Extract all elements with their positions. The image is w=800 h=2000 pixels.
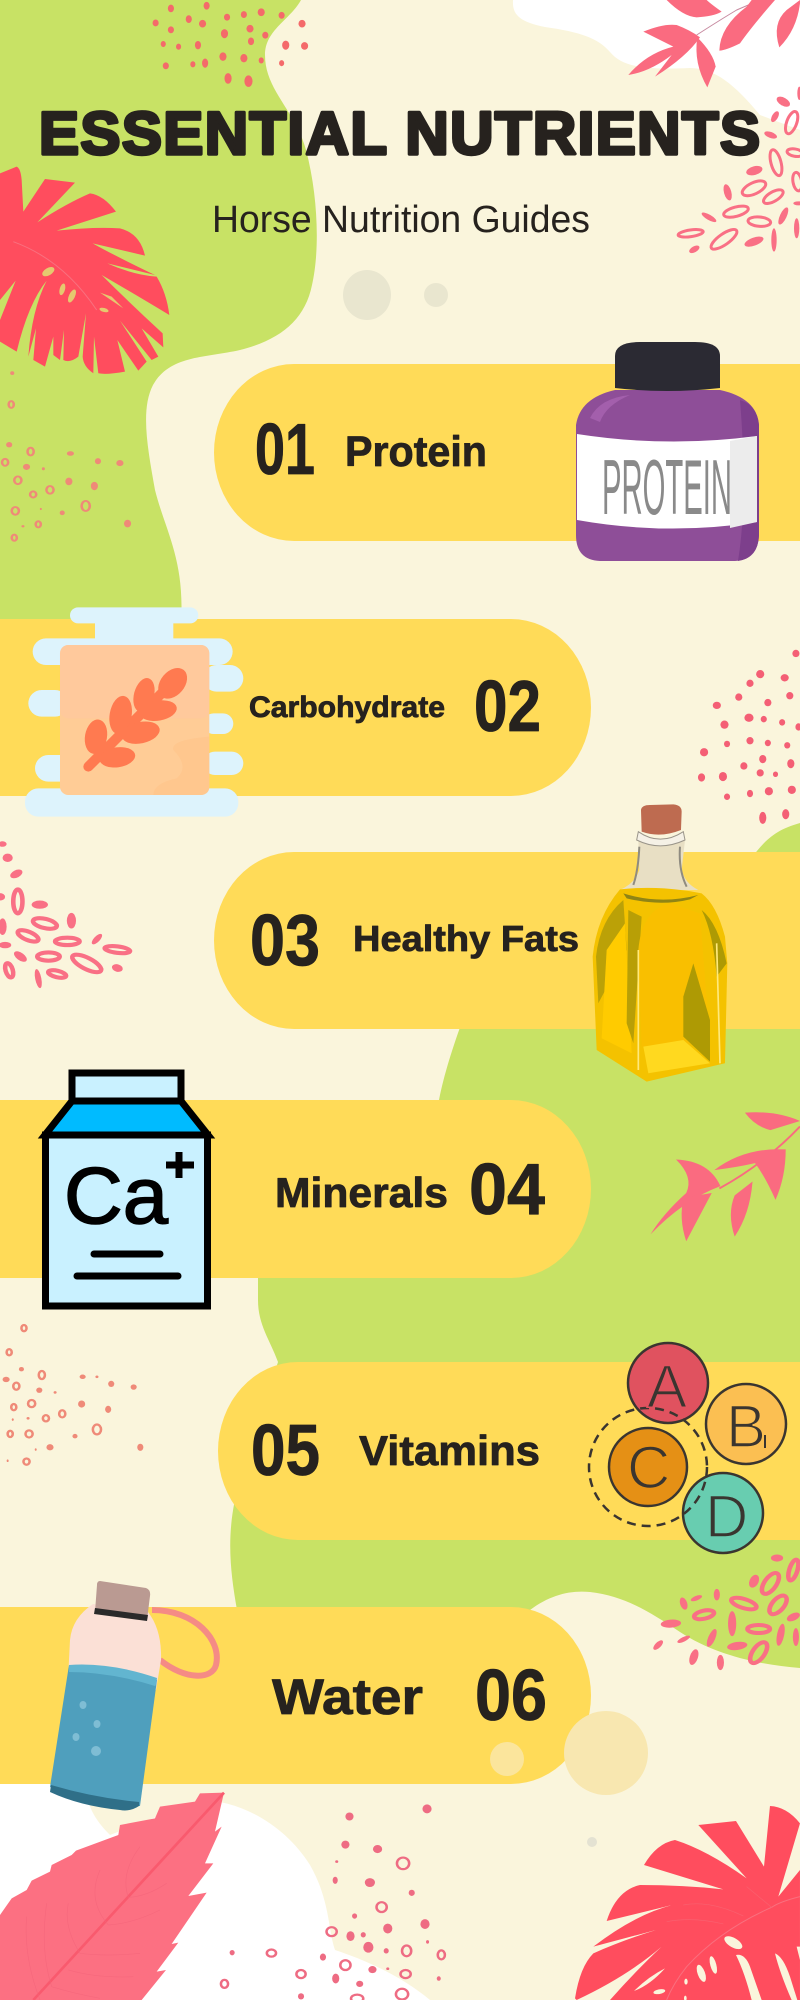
decorative circles: top: [343, 270, 448, 320]
icon: water bottle: [50, 1581, 217, 1810]
leaf cluster: bottom right: [652, 1554, 800, 1670]
icon: protein jar: [576, 342, 759, 561]
icon: vitamin balls: C: [627, 1434, 670, 1501]
label healthy fats: Healthy Fats: [353, 918, 579, 959]
panel: 04 minerals: [0, 1073, 591, 1306]
banner 04: [0, 1100, 591, 1278]
number 03: 03: [250, 901, 320, 981]
number 01: 01: [255, 410, 315, 490]
banner 01: [214, 364, 800, 541]
icon: vitamin balls: D: [705, 1483, 748, 1550]
panel: 03 healthy fats: [214, 804, 800, 1082]
banner 02: [0, 619, 591, 796]
icon: vitamin balls: [589, 1343, 786, 1553]
dot cluster: right middle: [698, 650, 800, 824]
icon: oil bottle: [593, 804, 727, 1082]
number 04: 04: [469, 1150, 545, 1230]
monstera leaf: bottom right: [575, 1806, 800, 2000]
green blob: right side: [230, 823, 800, 1668]
panel: 01 protein: [214, 342, 800, 561]
panel: 05 vitamins: [218, 1343, 800, 1553]
decorative circles: bottom: [490, 1711, 648, 1847]
label vitamins: Vitamins: [359, 1427, 540, 1474]
title: ESSENTIAL NUTRIENTS: [39, 100, 760, 167]
banner 06: [0, 1607, 591, 1784]
icon: vitamin balls: A: [647, 1353, 687, 1420]
leaf branch: top right: [628, 0, 800, 87]
icon: vitamin balls: B: [726, 1393, 766, 1460]
banner 03: [214, 852, 800, 1029]
number 06: 06: [475, 1656, 547, 1736]
green blob: top left: [0, 0, 317, 622]
leaf cluster: left middle: [0, 841, 130, 989]
label carbohydrate: Carbohydrate: [249, 691, 445, 724]
dot cluster: top: [153, 2, 308, 87]
icon: calcium carton: [45, 1073, 208, 1306]
white blob: bottom left: [0, 1780, 430, 2000]
number 02: 02: [474, 667, 541, 747]
dot cluster: left upper: [2, 371, 131, 541]
panel: 06 water: [0, 1581, 591, 1810]
label protein: Protein: [345, 428, 487, 476]
icon: wheat: [25, 607, 243, 817]
label minerals: Minerals: [275, 1169, 448, 1216]
dot cluster: left lower: [3, 1325, 143, 1465]
feather leaf: bottom left: [0, 1793, 224, 2000]
monstera leaf: top left: [0, 167, 169, 374]
number 05: 05: [251, 1411, 320, 1491]
icon: calcium carton: Ca: [64, 1151, 169, 1240]
dot cluster: bottom: [221, 1804, 445, 2000]
subtitle: Horse Nutrition Guides: [212, 199, 590, 241]
white blob: top right: [513, 0, 800, 130]
banner 05: [218, 1362, 800, 1540]
label water: Water: [272, 1669, 423, 1725]
leaf branch: right middle: [651, 1112, 800, 1241]
leaf cluster: top right: [678, 87, 800, 255]
panel: 02 carbohydrate: [0, 607, 591, 817]
